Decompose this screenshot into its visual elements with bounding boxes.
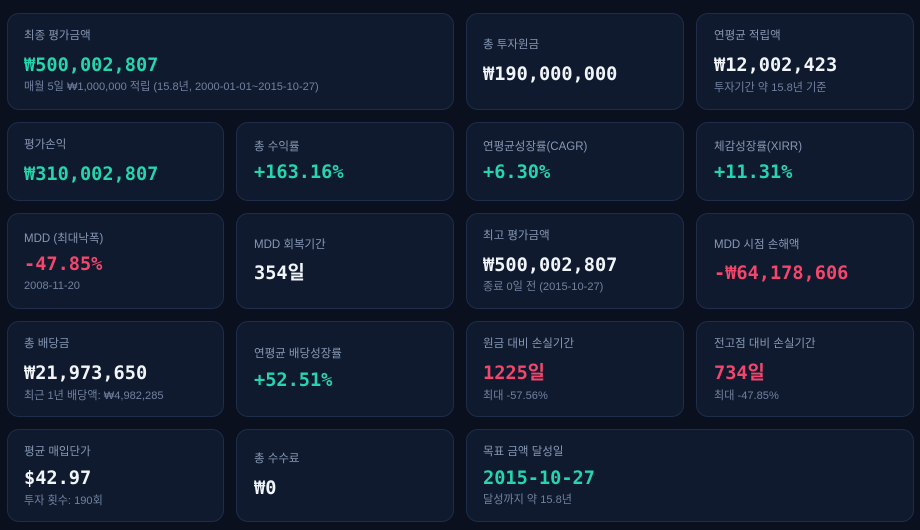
panel: total dividends [7, 321, 224, 417]
value: 2015-10-27 [483, 468, 595, 489]
note: 종료 0일 전 (2015-10-27) [483, 281, 603, 293]
panel: profit and loss [7, 122, 224, 201]
value: 1225일 [483, 363, 545, 384]
value: 354일 [254, 263, 305, 284]
note: 매월 5일 ₩1,000,000 적립 (15.8년, 2000-01-01~2015-10-27) [24, 81, 319, 93]
label: 최종 평가금액 [24, 30, 91, 42]
value: -47.85% [24, 254, 102, 275]
value: +6.30% [483, 162, 550, 183]
label: 총 수수료 [254, 453, 300, 465]
label: 연평균 적립액 [714, 30, 781, 42]
value: 734일 [714, 363, 765, 384]
panel: target achievement date [466, 429, 914, 522]
label: 원금 대비 손실기간 [483, 338, 574, 350]
panel: average purchase price [7, 429, 224, 522]
note: 투자 횟수: 190회 [24, 495, 103, 507]
panel: annual contribution [696, 13, 914, 110]
note: 최대 -47.85% [714, 390, 779, 402]
label: 체감성장률(XIRR) [714, 141, 802, 153]
label: 총 수익률 [254, 141, 300, 153]
label: 전고점 대비 손실기간 [714, 338, 816, 350]
value: +11.31% [714, 162, 792, 183]
panel: dividend growth [236, 321, 454, 417]
value: -₩64,178,606 [714, 263, 848, 284]
note: 2008-11-20 [24, 280, 80, 292]
value: ₩0 [254, 478, 276, 499]
note: 최대 -57.56% [483, 390, 548, 402]
value: ₩500,002,807 [24, 55, 158, 76]
value: $42.97 [24, 468, 91, 489]
label: 최고 평가금액 [483, 230, 550, 242]
note: 최근 1년 배당액: ₩4,982,285 [24, 390, 164, 402]
panel: loss period vs peak [696, 321, 914, 417]
value: +163.16% [254, 162, 344, 183]
label: 평가손익 [24, 139, 66, 151]
value: ₩500,002,807 [483, 255, 617, 276]
panel: MDD recovery [236, 213, 454, 309]
label: MDD 회복기간 [254, 239, 326, 251]
value: ₩310,002,807 [24, 164, 158, 185]
value: ₩190,000,000 [483, 64, 617, 85]
note: 달성까지 약 15.8년 [483, 494, 572, 506]
label: 목표 금액 달성일 [483, 446, 563, 458]
label: 총 배당금 [24, 338, 70, 350]
label: 연평균성장률(CAGR) [483, 141, 587, 153]
label: 총 투자원금 [483, 39, 539, 51]
panel: loss period vs principal [466, 321, 684, 417]
panel: final valuation [7, 13, 454, 110]
panel: loss at MDD [696, 213, 914, 309]
panel: peak valuation [466, 213, 684, 309]
panel: CAGR [466, 122, 684, 201]
label: 평균 매입단가 [24, 446, 91, 458]
label: MDD (최대낙폭) [24, 233, 103, 245]
label: MDD 시점 손해액 [714, 239, 799, 251]
note: 투자기간 약 15.8년 기준 [714, 82, 826, 94]
panel: total fees [236, 429, 454, 522]
value: ₩21,973,650 [24, 363, 147, 384]
value: ₩12,002,423 [714, 55, 837, 76]
panel: total principal [466, 13, 684, 110]
value: +52.51% [254, 370, 332, 391]
panel: MDD [7, 213, 224, 309]
label: 연평균 배당성장률 [254, 348, 342, 360]
panel: XIRR [696, 122, 914, 201]
panel: total return [236, 122, 454, 201]
